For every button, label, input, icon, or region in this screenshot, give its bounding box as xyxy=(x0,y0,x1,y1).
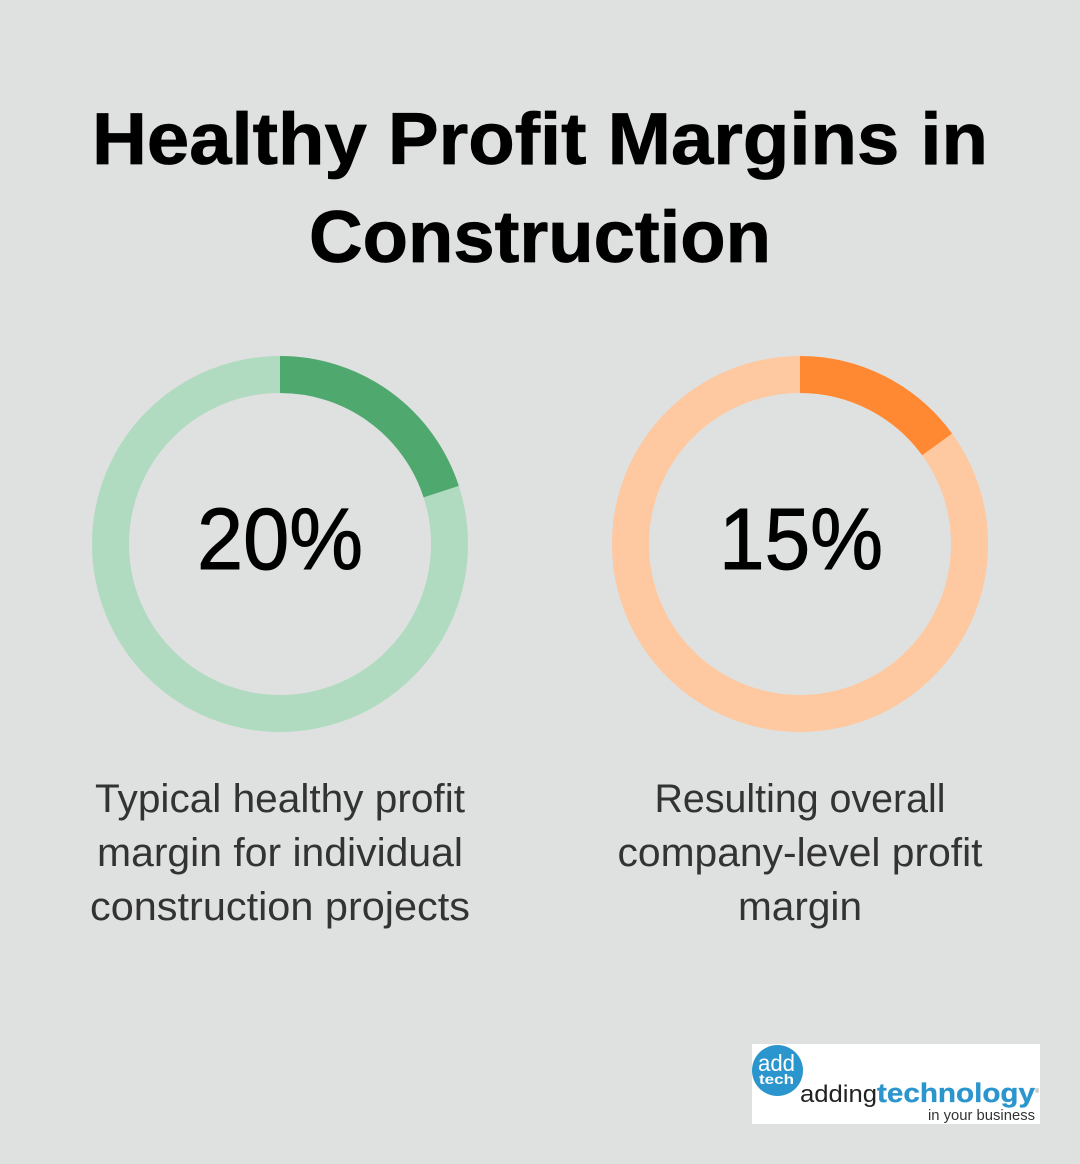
description: company margin: Resulting overall xyxy=(654,777,946,821)
description: project margin: margin for individual xyxy=(97,831,463,875)
description: company margin xyxy=(618,777,982,929)
wordmark: ® xyxy=(1035,1088,1040,1095)
description: company margin: margin xyxy=(738,885,862,929)
value: 15%: 15% xyxy=(719,491,883,588)
icon: add tech badge: add xyxy=(758,1050,795,1076)
title: Healthy Profit Margins in xyxy=(92,99,988,180)
title: Construction xyxy=(309,197,771,278)
donut chart: 15% xyxy=(630,374,970,714)
icon: add tech badge xyxy=(752,1045,803,1096)
donut chart: 20% xyxy=(110,374,450,714)
tagline: in your business xyxy=(928,1108,1035,1124)
description: project margin xyxy=(90,777,470,929)
wordmark xyxy=(800,1078,1040,1108)
value: 20%: 20% xyxy=(197,491,363,588)
description: project margin: construction projects xyxy=(90,885,470,929)
description: company margin: company-level profit xyxy=(618,831,982,875)
wordmark: technology xyxy=(877,1078,1035,1108)
panel: 15% company margin xyxy=(618,374,982,929)
title xyxy=(92,99,988,278)
description: project margin: Typical healthy profit xyxy=(95,777,465,821)
panel: 20% project margin xyxy=(90,374,470,929)
icon: add tech badge: tech xyxy=(759,1072,794,1087)
wordmark: adding xyxy=(800,1081,877,1108)
logo: adding technology xyxy=(752,1044,1040,1124)
